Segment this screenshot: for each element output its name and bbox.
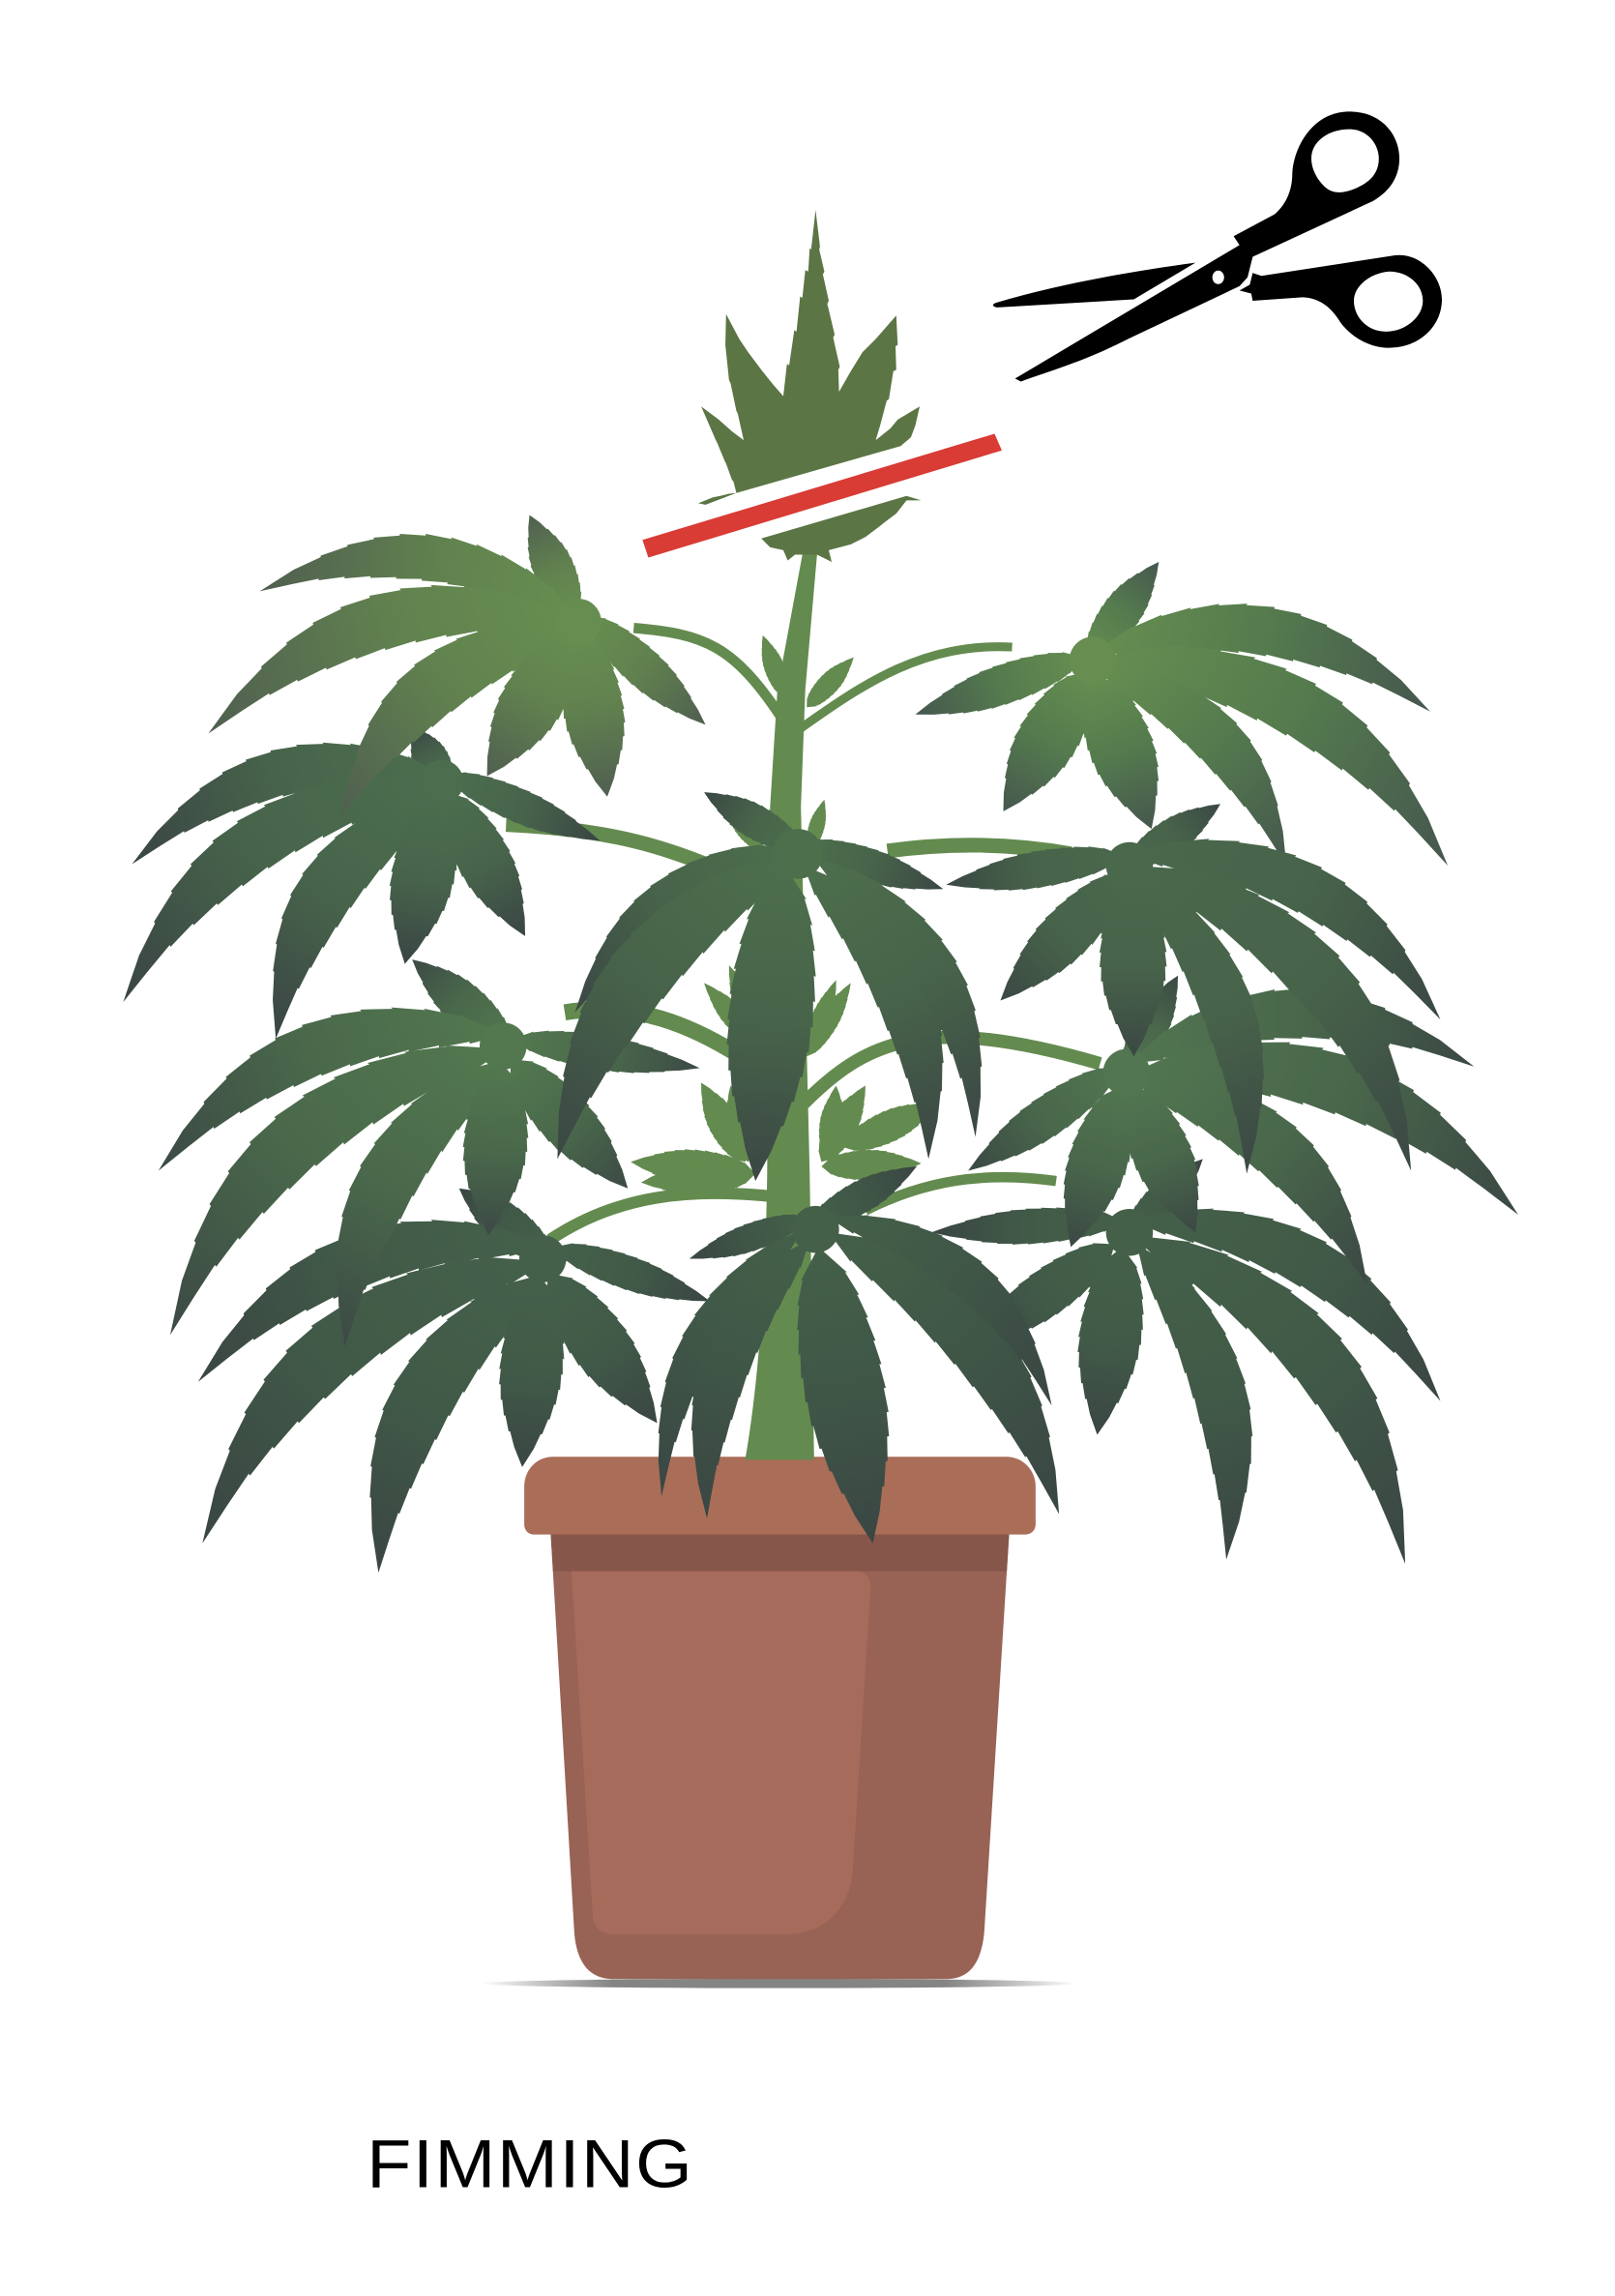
leaf: bottom centre	[611, 1152, 1116, 1550]
pot shadow	[482, 1979, 1076, 1988]
plant foliage	[74, 507, 1549, 1574]
leaf: centre	[492, 778, 1038, 1185]
small leaf fragment left of the cut	[698, 493, 736, 505]
small sprout leaves on the stem	[629, 632, 946, 1199]
pot shadow band	[550, 1533, 1010, 1572]
leaf: middle right	[943, 784, 1480, 1174]
leaf: far right	[956, 967, 1549, 1285]
red cut line	[642, 433, 1002, 557]
leaf: top right	[909, 550, 1493, 867]
leaf: top left	[184, 507, 719, 818]
pot body	[550, 1533, 1010, 1979]
leaf: lower right	[930, 1147, 1481, 1564]
leaf: middle left	[106, 943, 702, 1347]
top leaf above the cut	[701, 210, 920, 493]
pot highlight	[572, 1572, 870, 1934]
side branches	[506, 628, 1101, 1240]
leaf: second from top left	[74, 707, 606, 1040]
leaf: lower left	[139, 1169, 716, 1574]
title: FIMMING	[367, 2127, 692, 2202]
pot rim	[524, 1457, 1036, 1535]
main stem	[746, 554, 817, 1459]
flower pot	[524, 1457, 1036, 1979]
lower leaf piece below the cut	[761, 496, 922, 562]
icon: scissors	[993, 111, 1442, 381]
